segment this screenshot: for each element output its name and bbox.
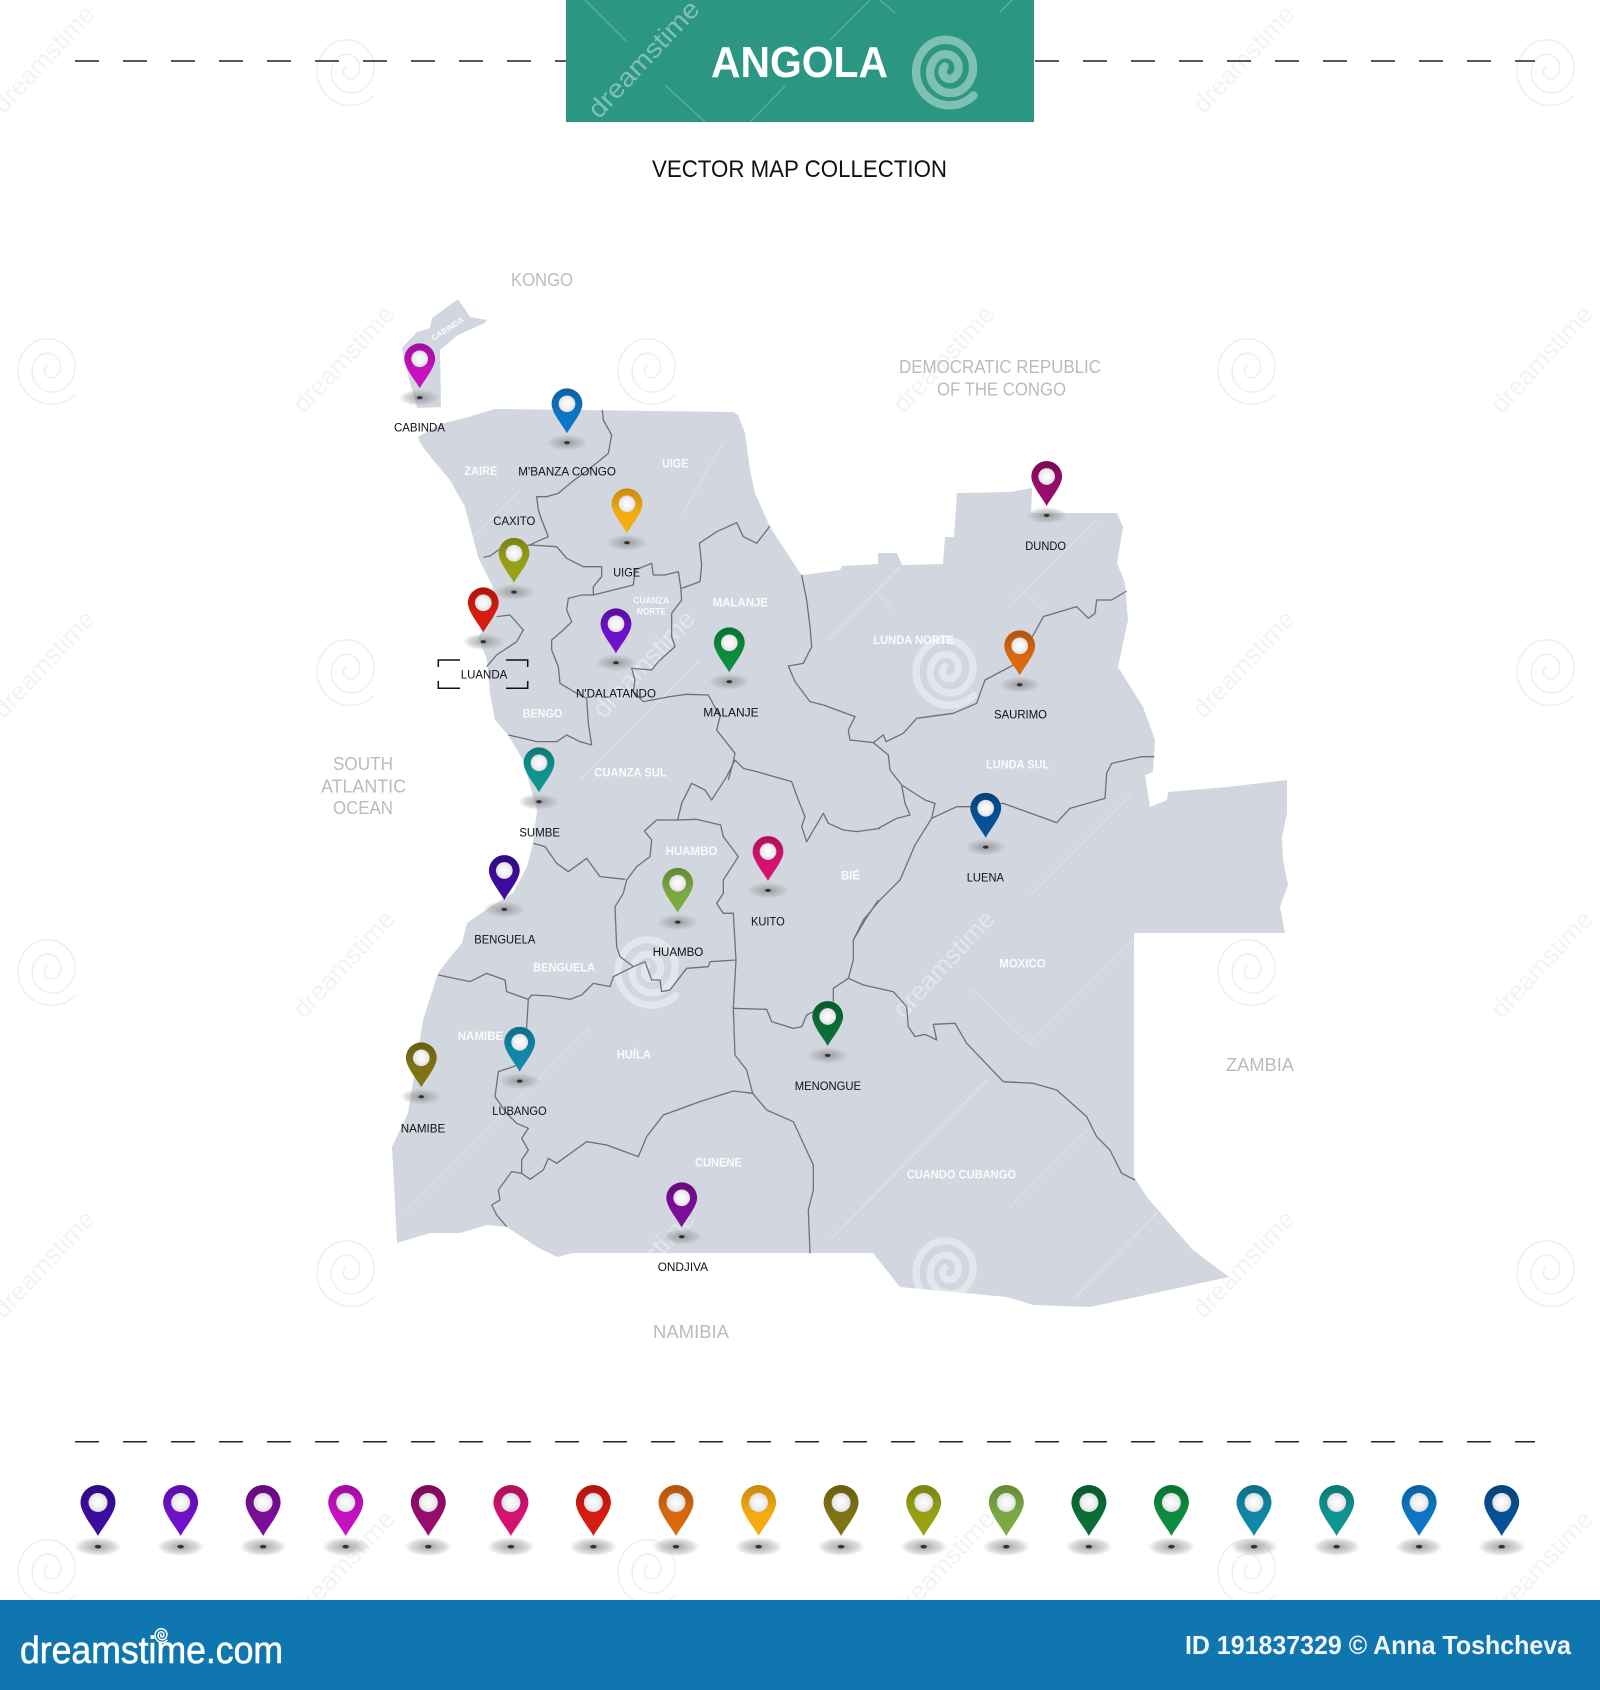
province names: CUANDO CUBANGO [907,1168,1016,1182]
map of Angola: dreamstime [586,604,701,724]
pin: Cabinda: CABINDA [394,421,446,435]
neighbouring country labels: DEMOCRATIC REPUBLIC [899,357,1101,377]
province names: CUANZA [633,595,670,605]
pin: Huambo: HUAMBO [653,945,703,959]
pin: Luena [965,793,1007,885]
pin: M'Banza Congo: M'BANZA CONGO [518,464,616,478]
pin: Luanda: LUANDA [461,667,508,681]
neighbouring country labels: ATLANTIC [321,776,406,796]
pin: Ondjiva: ONDJIVA [658,1260,709,1274]
watermark on white background: dreamstime [886,299,1001,419]
neighbouring country labels: OCEAN [333,798,393,818]
pin: Dundo: DUNDO [1025,539,1066,553]
pin: Saurimo: SAURIMO [994,707,1047,721]
pin: Malanje [703,627,759,720]
province names [430,315,1049,1182]
watermark on white background: dreamstime [1186,0,1301,119]
banner swirl [902,28,993,119]
neighbouring country labels: OF THE CONGO [937,380,1066,400]
map of Angola [392,299,1288,1324]
pin: Lubango: LUBANGO [492,1104,547,1118]
watermark on white background: dreamstime [886,1504,1001,1624]
pin: Luanda [461,587,508,681]
province names: MOXICO [999,957,1046,971]
pin: M'Banza Congo [518,388,616,478]
watermark on white background: dreamstime [1484,1504,1599,1624]
map of Angola: dreamstime [586,1204,701,1324]
watermark on white background: dreamstime [286,904,401,1024]
watermark on white background: dreamstime [1484,904,1599,1024]
land silhouette [392,299,1288,1307]
watermark on white background: dreamstime [1484,299,1599,419]
luanda capital frame [438,660,528,688]
province names: HUAMBO [666,844,717,858]
pin: Menongue [795,1001,861,1093]
pin: Sumbe: SUMBE [519,826,560,840]
pin: Benguela [474,855,536,946]
footer bar [0,1600,1600,1690]
pin: N'Dalatando [576,608,656,700]
pin: Uige: UIGE [613,566,640,580]
pin: Saurimo [994,630,1047,721]
watermark on white background: dreamstime [1186,1204,1301,1324]
pin: Namibe [400,1042,445,1136]
pin: Uige [606,488,648,580]
title banner [566,0,1034,124]
neighbouring country labels: ZAMBIA [1226,1055,1294,1075]
province names: NAMIBE [458,1029,503,1043]
pin: Ondjiva [658,1182,709,1274]
province names: CUANZA SUL [594,766,667,780]
province names: CABINDA [430,315,466,342]
pin: Luena: LUENA [967,871,1005,885]
province names: LUNDA SUL [986,757,1049,771]
pin: Kuito: KUITO [751,915,785,929]
pin: Sumbe [518,747,560,840]
pin colour legend row [74,1485,1526,1556]
title banner: dreamstime [581,0,706,124]
province names: MALANJE [713,596,768,610]
subtitle: VECTOR MAP COLLECTION [652,156,947,183]
watermark on white background: dreamstime [286,299,401,419]
neighbouring country labels: SOUTH [333,754,393,774]
pin: Caxito: CAXITO [493,514,535,528]
pin: Kuito [747,836,789,929]
province names: BENGUELA [533,961,595,975]
province names: BIÉ [841,867,860,882]
title text: ANGOLA [711,38,888,87]
footer logo: dreamstime.com [20,1630,283,1672]
province names: LUNDA NORTE [873,633,954,647]
pin: Dundo [1025,461,1068,553]
watermark on white background: dreamstime [1186,604,1301,724]
province names: UIGE [662,457,688,471]
footer logo swirl [152,1626,171,1645]
map of Angola: dreamstime [886,904,1001,1024]
province borders [438,410,1154,1253]
pin: Caxito [493,514,535,600]
pin: Cabinda [394,343,446,435]
pin: N'Dalatando: N'DALATANDO [576,686,656,700]
pin: Malanje: MALANJE [703,706,759,720]
province names: BENGO [523,707,562,721]
pin: Benguela: BENGUELA [474,932,536,946]
watermark on white background: dreamstime [286,1504,401,1624]
neighbouring country labels: NAMIBIA [653,1322,729,1342]
province names: NORTE [637,606,666,616]
pin: Huambo [653,868,703,959]
image id and credit: ID 191837329 © Anna Toshcheva [1185,1630,1572,1660]
pin: Lubango [492,1027,547,1118]
neighbouring country labels: KONGO [511,270,573,290]
province names: HUÍLA [617,1047,651,1062]
province names: CUNENE [695,1156,742,1170]
pin: Menongue: MENONGUE [795,1079,861,1093]
pin: Namibe: NAMIBE [401,1122,445,1136]
province names: ZAIRE [464,464,497,478]
neighbouring country labels [321,270,1294,1342]
